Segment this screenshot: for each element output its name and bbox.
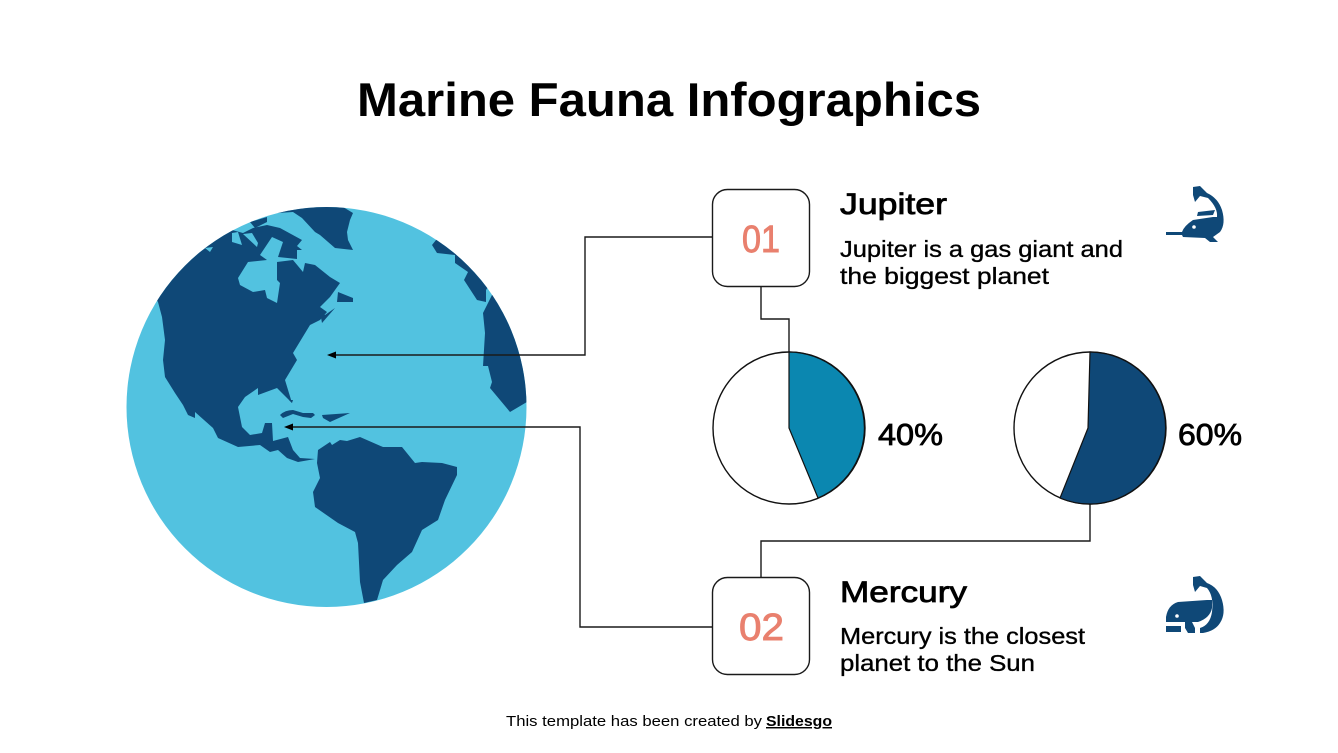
text block: Mercury: planet to the Sun xyxy=(840,650,1035,676)
Newfoundland xyxy=(337,292,353,302)
box 02: 02 xyxy=(739,607,784,649)
box 01 xyxy=(712,190,810,286)
Africa xyxy=(483,295,526,412)
Europe xyxy=(432,240,488,302)
text block: Jupiter xyxy=(840,188,1123,289)
North America xyxy=(157,225,340,462)
footer credit xyxy=(506,714,832,730)
Greenland xyxy=(278,207,353,250)
icon: whale xyxy=(1166,576,1224,633)
text block: Jupiter: Jupiter xyxy=(840,188,947,221)
Hispaniola xyxy=(322,413,350,422)
footer credit: Slidesgo xyxy=(766,714,832,730)
Cuba xyxy=(280,410,315,418)
connector: box 01 to globe xyxy=(327,237,712,358)
icon: narwhal xyxy=(1166,186,1224,242)
pie chart 60% xyxy=(1014,352,1166,504)
South America xyxy=(313,437,457,603)
globe xyxy=(126,200,540,607)
Arctic islands xyxy=(250,217,267,228)
text block: Jupiter: the biggest planet xyxy=(840,263,1050,289)
Bahamas xyxy=(289,400,293,403)
Arctic inlets xyxy=(205,232,258,252)
text block: Mercury: Mercury xyxy=(840,576,967,609)
connector: box 01 to pie 40% xyxy=(761,286,789,352)
title: Marine Fauna Infographics xyxy=(357,73,981,126)
connector: pie 60% to box 02 xyxy=(761,504,1090,577)
footer credit: This template has been created by xyxy=(506,714,763,730)
label 40%: 40% xyxy=(878,417,943,452)
connector: box 02 to globe xyxy=(284,424,712,627)
box 02 xyxy=(712,578,810,674)
box 01: 01 xyxy=(742,219,780,261)
label 60%: 60% xyxy=(1178,417,1242,452)
text block: Mercury xyxy=(840,576,1086,676)
pie chart 40% xyxy=(713,352,865,504)
text block: Jupiter: Jupiter is a gas giant and xyxy=(840,236,1123,262)
Nova Scotia xyxy=(320,308,335,323)
text block: Mercury: Mercury is the closest xyxy=(840,623,1086,649)
